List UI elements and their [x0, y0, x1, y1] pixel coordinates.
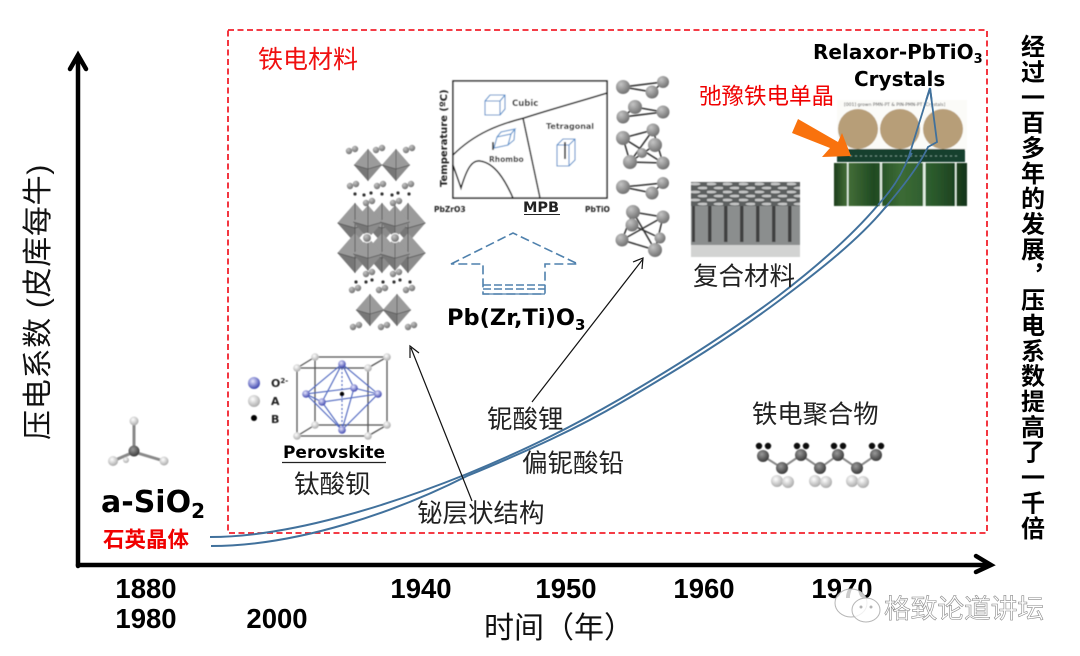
perovskite legend: B [271, 413, 279, 426]
perovskite legend: O [271, 377, 280, 390]
label: bismuth layered structure: 铋层状结构 [417, 500, 545, 528]
label: barium titanate: 钛酸钡 [294, 471, 371, 499]
label: composite material: 复合材料 [693, 263, 795, 291]
label: Relaxor-PbTiO3 Crystals: Relaxor-PbTiO [813, 40, 983, 67]
x axis arrow [78, 556, 991, 572]
x axis year labels: 1960 [673, 573, 735, 604]
layered perovskite structure [338, 145, 426, 330]
x axis year labels: 1880 [115, 573, 177, 604]
label: PZT formula: Pb(Zr,Ti)O [447, 305, 575, 331]
right vertical conclusion text: 经过一百多年的发展，压电系数提高了一千倍 [1016, 34, 1044, 541]
dashed up arrow [451, 233, 578, 294]
label: a-SiO2: a-SiO [101, 485, 191, 520]
tetragonal atom stack [616, 76, 670, 257]
arrow to layered perovskite [410, 346, 472, 501]
molecule: quartz a-SiO2 [108, 416, 168, 466]
label: relaxor single crystal: 弛豫铁电单晶 [699, 84, 834, 109]
phase diagram: Cubic [512, 99, 538, 109]
relaxor crystals photo: [001] grown PMN-PT & PIN-PMN-PT [Crystals] [844, 102, 946, 108]
phase diagram: PbZrO3 [434, 205, 466, 214]
x axis year labels: 1970 [811, 573, 873, 604]
phase diagram [434, 81, 610, 214]
x axis year labels [115, 573, 873, 634]
dashed box: ferroelectric materials [228, 30, 987, 533]
label: Perovskite: Perovskite [283, 443, 385, 463]
perovskite legend: A [271, 395, 280, 408]
arrow to niobate structure [532, 258, 643, 402]
x axis year labels: 1940 [390, 573, 452, 604]
perovskite legend: 2- [280, 377, 288, 385]
label: ferroelectric materials: 铁电材料 [258, 46, 358, 74]
perovskite unit cell [293, 353, 391, 440]
watermark icon [835, 589, 880, 622]
watermark text: 格致论道讲坛 [884, 594, 1044, 624]
composite nanopillar image [691, 182, 800, 257]
perovskite legend [248, 377, 288, 426]
x axis year labels: 1980 [115, 603, 177, 634]
label: PZT formula: 3 [575, 316, 585, 334]
polymer molecule [756, 443, 884, 488]
label: Relaxor-PbTiO3 Crystals: 3 [974, 52, 983, 67]
x axis year labels: 2000 [246, 603, 308, 634]
relaxor crystals photo [834, 100, 967, 206]
label: MPB: MPB [523, 200, 559, 216]
label: lead metaniobate: 偏铌酸铅 [522, 450, 624, 478]
orange arrow [792, 119, 851, 157]
x axis year labels: 1950 [535, 573, 597, 604]
phase diagram: Temperature (ºC) [439, 89, 450, 187]
label: Relaxor-PbTiO3 Crystals: Crystals [854, 67, 945, 91]
growth curve [210, 88, 937, 546]
phase diagram: PbTiO [585, 205, 610, 214]
label: ferroelectric polymer: 铁电聚合物 [752, 401, 878, 429]
y axis label: 压电系数 (皮库每牛) [22, 164, 55, 440]
x axis label: 时间（年） [484, 612, 634, 645]
label: lithium niobate: 铌酸锂 [487, 406, 564, 434]
phase diagram: Rhombo [489, 155, 524, 164]
y axis arrow [70, 55, 86, 566]
label: quartz crystal: 石英晶体 [103, 528, 190, 552]
label: a-SiO2: 2 [191, 499, 205, 523]
phase diagram: Tetragonal [546, 122, 594, 131]
curve over photo [878, 88, 937, 209]
